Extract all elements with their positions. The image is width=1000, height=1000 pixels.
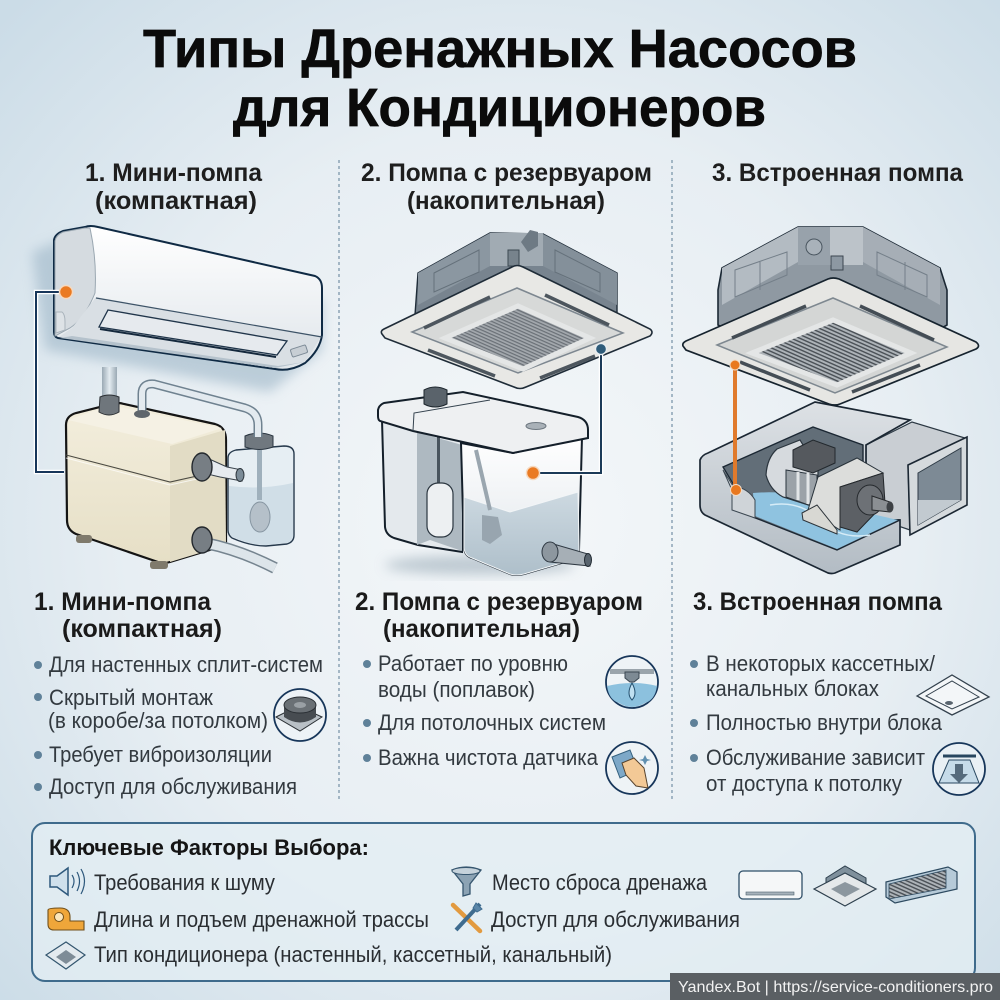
illustration: reservoir pump <box>378 230 652 575</box>
panel: key selection factors <box>32 823 975 981</box>
watermark <box>670 973 1000 1000</box>
duct housing with pump <box>700 402 967 574</box>
bullet list: Требует виброизоляции <box>49 742 272 767</box>
section heading: 2. Помпа с резервуаром <box>355 588 643 616</box>
bullet list: Важна чистота датчика <box>378 745 599 770</box>
icon: vibration mount <box>274 689 326 741</box>
bullet list <box>363 651 606 770</box>
section heading <box>34 588 222 643</box>
panel text: mini pump <box>34 588 326 799</box>
section heading: 3. Встроенная помпа <box>693 588 943 616</box>
icon: mini wall unit <box>739 871 802 899</box>
bullet list: от доступа к потолку <box>706 771 902 796</box>
wall air conditioner <box>32 226 322 392</box>
factor: service access: Доступ для обслуживания <box>491 907 740 932</box>
title: для Кондиционеров <box>233 78 766 138</box>
bullet list: канальных блоках <box>706 676 879 701</box>
bullet list: Для потолочных систем <box>378 710 606 735</box>
icon: water level <box>606 656 658 708</box>
title: Типы Дренажных Насосов <box>143 19 857 79</box>
icon: mini cassette <box>814 866 876 906</box>
factors heading: Ключевые Факторы Выбора: <box>49 835 369 860</box>
column heading 2 <box>361 159 652 215</box>
water tank <box>378 387 592 575</box>
bullet list: Работает по уровню <box>378 651 568 676</box>
icon: ceiling access <box>933 743 985 795</box>
section heading <box>355 588 643 643</box>
column heading 3: 3. Встроенная помпа <box>712 159 964 187</box>
bullet list: Скрытый монтаж <box>49 685 213 710</box>
column heading 1: (компактная) <box>95 187 257 215</box>
column heading 1 <box>85 159 263 215</box>
bullet list: Для настенных сплит-систем <box>49 652 323 677</box>
pump pipes and fittings <box>99 367 275 568</box>
icon: speaker <box>50 868 84 895</box>
bullet list: В некоторых кассетных/ <box>706 651 936 676</box>
callout line: reservoir <box>526 344 606 480</box>
icon: ceiling panel <box>917 675 989 715</box>
title <box>143 19 857 138</box>
cassette unit <box>381 230 652 388</box>
factor: drain location: Место сброса дренажа <box>492 870 708 895</box>
section heading: 1. Мини-помпа <box>34 588 212 616</box>
pump body <box>66 403 226 569</box>
bullet list: Доступ для обслуживания <box>49 774 297 799</box>
cassette unit built-in <box>683 227 978 405</box>
icon: cassette type <box>46 942 85 969</box>
icon: hand cleaning <box>606 742 658 794</box>
bullet list <box>34 652 323 799</box>
factor: unit type: Тип кондиционера (настенный, кассетный, канальный) <box>94 942 612 967</box>
icon: tape measure <box>48 908 84 930</box>
bullet list: воды (поплавок) <box>378 677 535 702</box>
column heading 1: 1. Мини-помпа <box>85 159 263 187</box>
panel text: built-in pump <box>690 588 989 796</box>
column heading 2: (накопительная) <box>407 187 605 215</box>
factor: noise: Требования к шуму <box>94 870 275 895</box>
column heading 2: 2. Помпа с резервуаром <box>361 159 652 187</box>
bullet list <box>690 651 943 796</box>
illustration: built-in pump <box>683 227 978 574</box>
icon: tools <box>453 903 482 931</box>
watermark: Yandex.Bot | https://service-conditioners.pro <box>678 979 993 996</box>
panel text: reservoir pump <box>355 588 658 794</box>
bullet list: Полностью внутри блока <box>706 710 943 735</box>
bullet list: Обслуживание зависит <box>706 745 925 770</box>
factor: line length: Длина и подъем дренажной трассы <box>94 907 429 932</box>
callout line: mini pump <box>36 286 72 472</box>
section heading: (накопительная) <box>383 615 580 643</box>
icon: mini duct <box>886 867 957 903</box>
section heading: (компактная) <box>62 615 222 643</box>
callout line: built-in <box>730 360 742 496</box>
illustration: mini pump <box>32 226 322 569</box>
bullet list: (в коробе/за потолком) <box>48 708 268 733</box>
icon: funnel <box>452 867 481 896</box>
drain bottle <box>228 433 294 546</box>
